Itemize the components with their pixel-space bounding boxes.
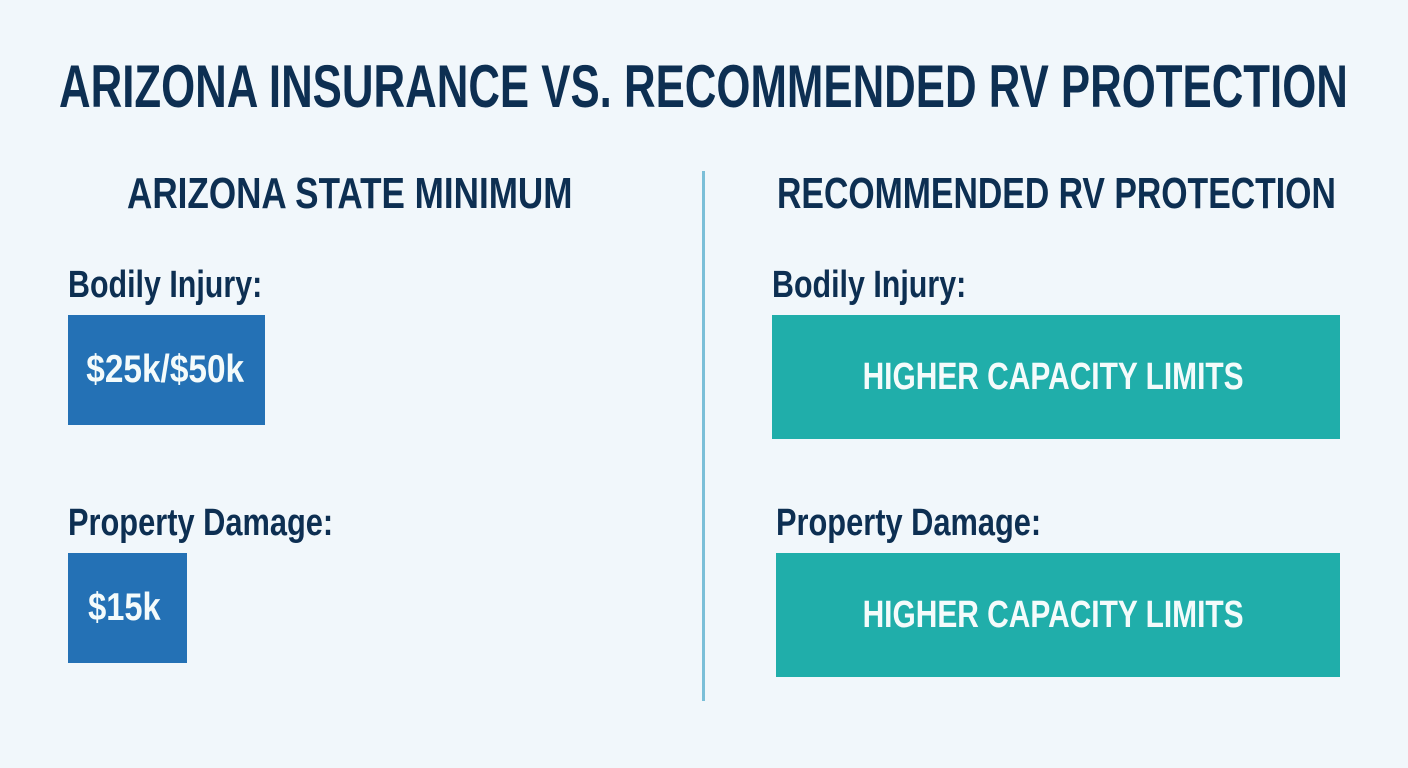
heading: Arizona state minimum: ARIZONA STATE MINIMUM xyxy=(127,169,572,218)
panel: Arizona state minimum xyxy=(68,169,572,663)
label: property damage: Property Damage: xyxy=(68,502,333,544)
label: bodily injury: Bodily Injury: xyxy=(772,264,966,306)
heading: recommended RV protection: RECOMMENDED RV PROTECTION xyxy=(777,169,1336,218)
bar: bodily injury minimum xyxy=(68,315,265,425)
label: property damage: Property Damage: xyxy=(776,502,1041,544)
bar: bodily injury minimum: $25k/$50k xyxy=(87,348,244,391)
panel: recommended RV protection xyxy=(772,169,1340,677)
bar: property damage recommended: HIGHER CAPACITY LIMITS xyxy=(863,594,1244,636)
bar: bodily injury recommended xyxy=(772,315,1340,439)
bar: property damage minimum: $15k xyxy=(88,586,161,629)
bar: property damage minimum xyxy=(68,553,187,663)
title: ARIZONA INSURANCE VS. RECOMMENDED RV PROTECTION xyxy=(59,53,1348,120)
label: bodily injury: Bodily Injury: xyxy=(68,264,262,306)
divider xyxy=(702,171,705,701)
bar: bodily injury recommended: HIGHER CAPACITY LIMITS xyxy=(863,356,1244,398)
bar: property damage recommended xyxy=(776,553,1340,677)
